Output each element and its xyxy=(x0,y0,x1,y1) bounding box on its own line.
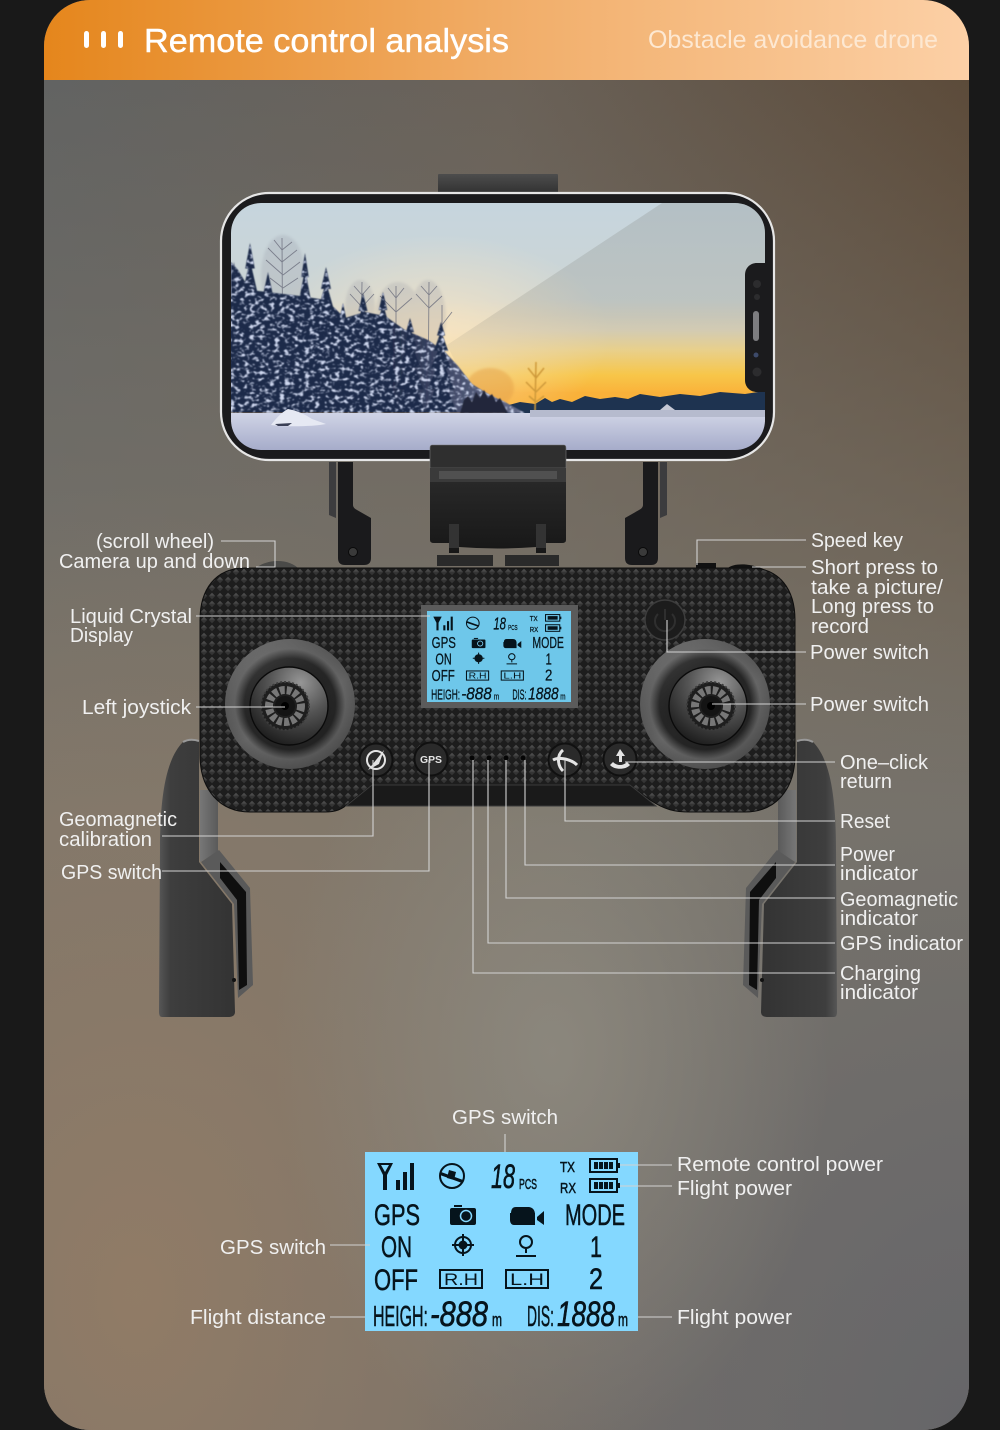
callout: charging indicator: Charging xyxy=(840,963,921,985)
icon: three bars xyxy=(84,31,123,48)
callout: flight power: Flight power xyxy=(677,1178,792,1200)
callout: LCD: Display xyxy=(70,625,133,647)
left joystick xyxy=(225,639,355,769)
RX: RX xyxy=(560,1180,576,1197)
R.H: R.H xyxy=(444,1270,478,1289)
OFF: OFF xyxy=(374,1264,418,1297)
satellite count: 18 xyxy=(491,1158,515,1196)
bottom clamp and mount xyxy=(430,445,566,566)
TX: TX xyxy=(560,1159,575,1176)
icon: video camera xyxy=(510,1207,544,1225)
LCD ON: ON xyxy=(435,652,452,668)
LCD m: m xyxy=(560,692,566,701)
phone notch xyxy=(745,263,765,392)
bare tree crowns xyxy=(261,235,446,356)
2: 2 xyxy=(589,1263,603,1296)
callout: one-click return: return xyxy=(840,771,892,793)
callout: shutter: Long press to xyxy=(811,596,934,618)
callout: speed key xyxy=(697,530,903,565)
controller body xyxy=(200,568,795,812)
controller xyxy=(200,561,795,812)
left handle xyxy=(159,740,253,1017)
callout: power indicator: Power xyxy=(840,844,895,866)
callout: GPS switch xyxy=(61,760,429,884)
callout: one-click return xyxy=(625,752,929,793)
LCD R.H: R.H xyxy=(469,671,487,681)
LCD distance value: 1888 xyxy=(528,684,559,703)
distance value: 1888 xyxy=(557,1295,615,1334)
small LCD: DIS: xyxy=(512,687,527,703)
HEIGH: HEIGH: xyxy=(373,1301,428,1333)
L.H: L.H xyxy=(510,1270,544,1289)
callout: GPS switch top: GPS switch xyxy=(452,1107,558,1129)
right joystick xyxy=(640,639,770,769)
callout: reset xyxy=(565,760,890,833)
holder arm: left xyxy=(329,462,371,565)
subtitle: Obstacle avoidance drone xyxy=(648,26,938,54)
LCD OFF: OFF xyxy=(432,668,455,685)
large LCD panel xyxy=(365,1152,638,1334)
LCD 1: 1 xyxy=(546,652,552,668)
snowfield xyxy=(231,413,765,450)
callout: GPS indicator: GPS indicator xyxy=(840,933,963,955)
LCD TX: TX xyxy=(530,614,538,623)
PCS: PCS xyxy=(519,1176,537,1193)
callout: shutter xyxy=(752,557,943,638)
callout: power indicator xyxy=(525,760,918,885)
m: m xyxy=(492,1310,502,1330)
ON: ON xyxy=(381,1231,412,1264)
snow on forest xyxy=(222,243,525,413)
callout: one-click return: One–click xyxy=(840,752,929,774)
button: GPS xyxy=(414,742,448,776)
callout: scroll wheel xyxy=(59,531,275,573)
callout: LCD xyxy=(70,606,430,647)
bare golden tree xyxy=(526,362,546,412)
button: one-click return xyxy=(604,742,636,776)
callout: power switch 2: Power switch xyxy=(810,694,929,716)
callout: geomagnetic calibration xyxy=(59,760,373,851)
callout: reset: Reset xyxy=(840,811,890,833)
callout: geomagnetic calibration: calibration xyxy=(59,829,152,851)
satellite icon xyxy=(440,1164,464,1188)
callouts: right xyxy=(473,530,963,1004)
LCD L.H: L.H xyxy=(503,671,521,681)
LCD video camera xyxy=(503,639,521,648)
callouts: large LCD xyxy=(190,1107,883,1329)
icon: home pin xyxy=(516,1236,536,1256)
signal icon xyxy=(377,1163,414,1190)
right handle xyxy=(743,740,837,1017)
callout: power switch xyxy=(667,620,929,664)
dark shrubs at forest edge xyxy=(460,390,508,413)
LCD count: 18 xyxy=(493,614,506,633)
icon: crosshair xyxy=(452,1234,474,1256)
speed key xyxy=(696,563,716,569)
callout: flight distance: Flight distance xyxy=(190,1307,326,1329)
callout: GPS indicator xyxy=(488,760,963,955)
LCD satellite icon xyxy=(466,617,479,629)
scroll wheel xyxy=(254,561,300,570)
callouts: left xyxy=(59,531,430,884)
callout: GPS switch left: GPS switch xyxy=(220,1237,326,1259)
button: GPS: GPS xyxy=(420,755,442,766)
MODE: MODE xyxy=(565,1199,625,1232)
LCD height value: -888 xyxy=(461,684,492,703)
LCD m: m xyxy=(494,692,499,701)
callout: geomagnetic calibration: Geomagnetic xyxy=(59,809,177,831)
button: compass xyxy=(360,744,392,776)
holder arm: right xyxy=(625,462,667,565)
callout: shutter: take a picture/ xyxy=(811,577,943,599)
callout: charging indicator xyxy=(473,760,921,1004)
callout: power indicator: indicator xyxy=(840,863,918,885)
callout: LCD: Liquid Crystal xyxy=(70,606,192,628)
LCD home pin xyxy=(507,654,517,664)
LCD signal icon xyxy=(433,617,453,630)
indicator lights xyxy=(469,755,526,761)
1: 1 xyxy=(590,1231,602,1264)
LCD RX: RX xyxy=(530,625,538,634)
callout: power switch: Power switch xyxy=(810,642,929,664)
notch camera details xyxy=(752,280,762,376)
callout: scroll wheel: (scroll wheel) xyxy=(96,531,214,553)
callout: geomagnetic indicator xyxy=(506,760,958,930)
LCD MODE: MODE xyxy=(532,635,564,652)
bare branches xyxy=(266,238,452,342)
callout: shutter: record xyxy=(811,616,869,638)
LCD HEIGH: HEIGH: xyxy=(431,687,460,703)
title: Remote control analysis xyxy=(144,22,509,59)
icon: camera xyxy=(450,1205,476,1225)
callout: GPS switch top xyxy=(452,1107,558,1152)
GPS: GPS xyxy=(374,1199,420,1232)
phone screen: winter sunset xyxy=(222,203,765,450)
lower grip band xyxy=(346,785,656,806)
phone holder arms xyxy=(329,462,667,565)
callout: GPS switch: GPS switch xyxy=(61,862,162,884)
callout: speed key: Speed key xyxy=(811,530,903,552)
orange glow shrubs xyxy=(468,367,514,402)
phone xyxy=(221,174,774,566)
callout: scroll wheel: Camera up and down xyxy=(59,551,250,573)
phone body xyxy=(221,193,774,460)
LCD 2: 2 xyxy=(545,668,552,685)
LCD PCS: PCS xyxy=(508,623,518,632)
forest xyxy=(222,243,525,413)
distant treeline xyxy=(505,391,765,413)
callout: left joystick: Left joystick xyxy=(82,697,192,719)
callout: remote control power: Remote control power xyxy=(677,1154,883,1176)
mount base bar xyxy=(437,555,559,566)
LCD crosshair xyxy=(473,653,484,664)
top clamp xyxy=(438,174,558,196)
shoulder button xyxy=(728,564,782,580)
large LCD panel: DIS: xyxy=(527,1301,554,1333)
height value: -888 xyxy=(430,1295,488,1334)
small LCD xyxy=(421,605,578,708)
callout: geomagnetic indicator: indicator xyxy=(840,908,918,930)
LCD batteries xyxy=(546,615,561,631)
batteries xyxy=(590,1159,620,1192)
callout: geomagnetic indicator: Geomagnetic xyxy=(840,889,958,911)
callout: flight power bottom: Flight power xyxy=(677,1307,792,1329)
power button xyxy=(645,600,685,640)
button: reset xyxy=(548,744,582,776)
callout: charging indicator: indicator xyxy=(840,982,918,1004)
m: m xyxy=(618,1310,628,1330)
handles xyxy=(159,740,837,1017)
R.H xyxy=(440,1270,482,1289)
L.H xyxy=(506,1270,548,1289)
LCD GPS: GPS xyxy=(432,635,456,652)
header bar xyxy=(84,22,938,59)
LCD camera xyxy=(472,638,485,648)
callout: shutter: Short press to xyxy=(811,557,938,579)
